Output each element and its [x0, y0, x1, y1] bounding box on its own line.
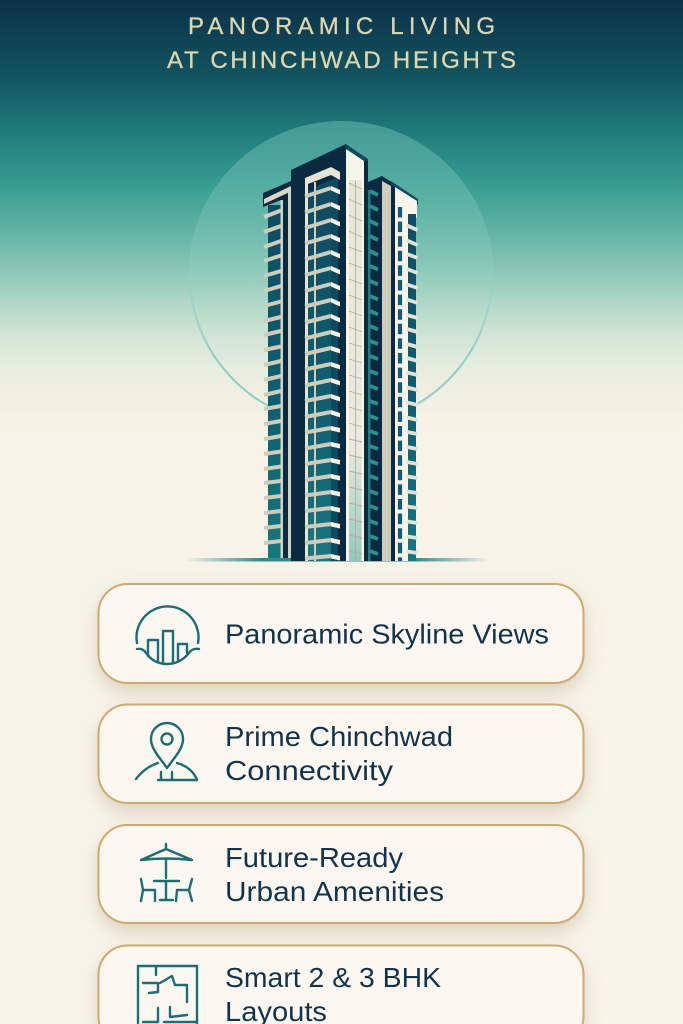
label: Connectivity: [225, 755, 393, 786]
icon: skyline in circle: [136, 606, 199, 664]
title: PANORAMIC LIVING: [188, 13, 495, 40]
label: [225, 721, 453, 786]
tower illustration: [263, 144, 418, 561]
cream front edge with glass grid: [346, 144, 368, 561]
right navy section with teal slots: [364, 161, 396, 561]
icon: floor plan: [138, 966, 197, 1023]
icon: map pin: [136, 723, 197, 780]
halo circle behind tower: [189, 121, 493, 425]
card: panoramic skyline views: [98, 584, 584, 683]
label: Panoramic Skyline Views: [225, 618, 549, 650]
title: AT CHINCHWAD HEIGHTS: [167, 47, 516, 74]
label: [225, 962, 441, 1024]
card: prime chinchwad connectivity: [98, 704, 584, 803]
label: Future-Ready: [225, 842, 403, 873]
card: smart 2 and 3 bhk layouts: [98, 946, 584, 1024]
label: [225, 842, 444, 907]
icon: patio umbrella table: [141, 844, 192, 901]
left wing: [263, 181, 292, 558]
right wing: [391, 181, 418, 561]
label: Smart 2 & 3 BHK: [225, 962, 441, 993]
ground shadow: [185, 558, 490, 562]
title: [167, 13, 516, 74]
card: future-ready urban amenities: [98, 825, 584, 923]
label: Prime Chinchwad: [225, 721, 453, 752]
main navy face: [291, 144, 347, 561]
label: Urban Amenities: [225, 876, 444, 907]
